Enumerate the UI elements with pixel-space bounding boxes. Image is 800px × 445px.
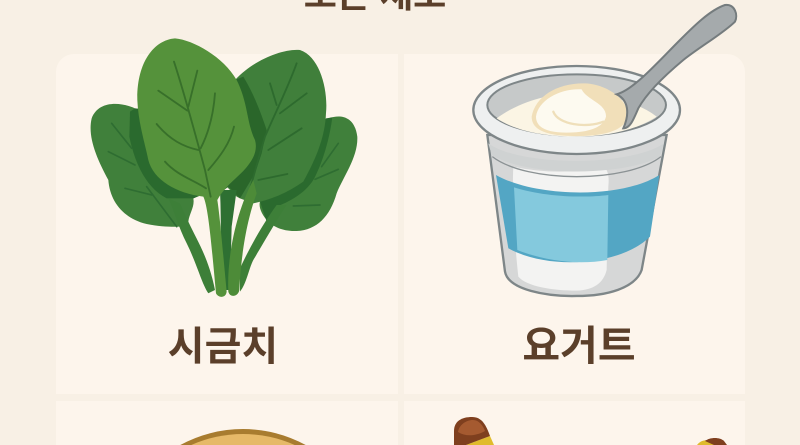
center leaf veins: [157, 62, 234, 197]
panel: bottom right card: [404, 401, 745, 445]
yogurt swirl: [553, 112, 603, 125]
item tip right: [697, 440, 716, 445]
icon: spinach: [91, 38, 357, 297]
cup rim: [473, 66, 680, 154]
far left leaf shadow: [129, 108, 213, 198]
icon: yogurt cup with spoon: [473, 5, 736, 296]
panel: yogurt card: [404, 54, 745, 394]
far right leaf: [260, 116, 357, 231]
blue label: [496, 175, 659, 262]
cup body: [487, 135, 667, 296]
item cap left: [454, 417, 490, 445]
back right leaf veins: [250, 63, 307, 190]
yogurt dollop highlight: [536, 89, 606, 133]
far left leaf veins: [108, 123, 177, 227]
center stem right: [228, 180, 257, 296]
right stem: [240, 205, 287, 292]
far left leaf: [91, 104, 213, 227]
item cap left highlight: [458, 420, 485, 435]
yogurt dollop: [532, 83, 628, 136]
blue label light: [514, 187, 608, 262]
cup inner wall: [487, 74, 666, 136]
yogurt surface: [497, 93, 657, 137]
rear stem: [220, 190, 237, 290]
rim shadow: [488, 143, 664, 171]
far right leaf veins: [293, 143, 338, 206]
left stem: [168, 198, 215, 293]
back right leaf: [213, 50, 326, 203]
panel: bottom left card: [56, 401, 398, 445]
icon: bottom right cropped items: [454, 417, 727, 445]
icon: bottom left bowl rim, cropped: [180, 429, 306, 445]
label: yogurt: 요거트: [522, 323, 636, 369]
panel: spinach card: [56, 54, 398, 394]
far right leaf shadow: [260, 117, 332, 222]
label: spinach: 시금치: [168, 325, 278, 369]
back right leaf shadow: [213, 77, 267, 198]
center leaf: [137, 38, 256, 297]
cup white highlight: [513, 167, 609, 291]
cup shoulder line: [492, 157, 661, 177]
spoon: [617, 5, 736, 128]
item stick left: [466, 436, 494, 445]
